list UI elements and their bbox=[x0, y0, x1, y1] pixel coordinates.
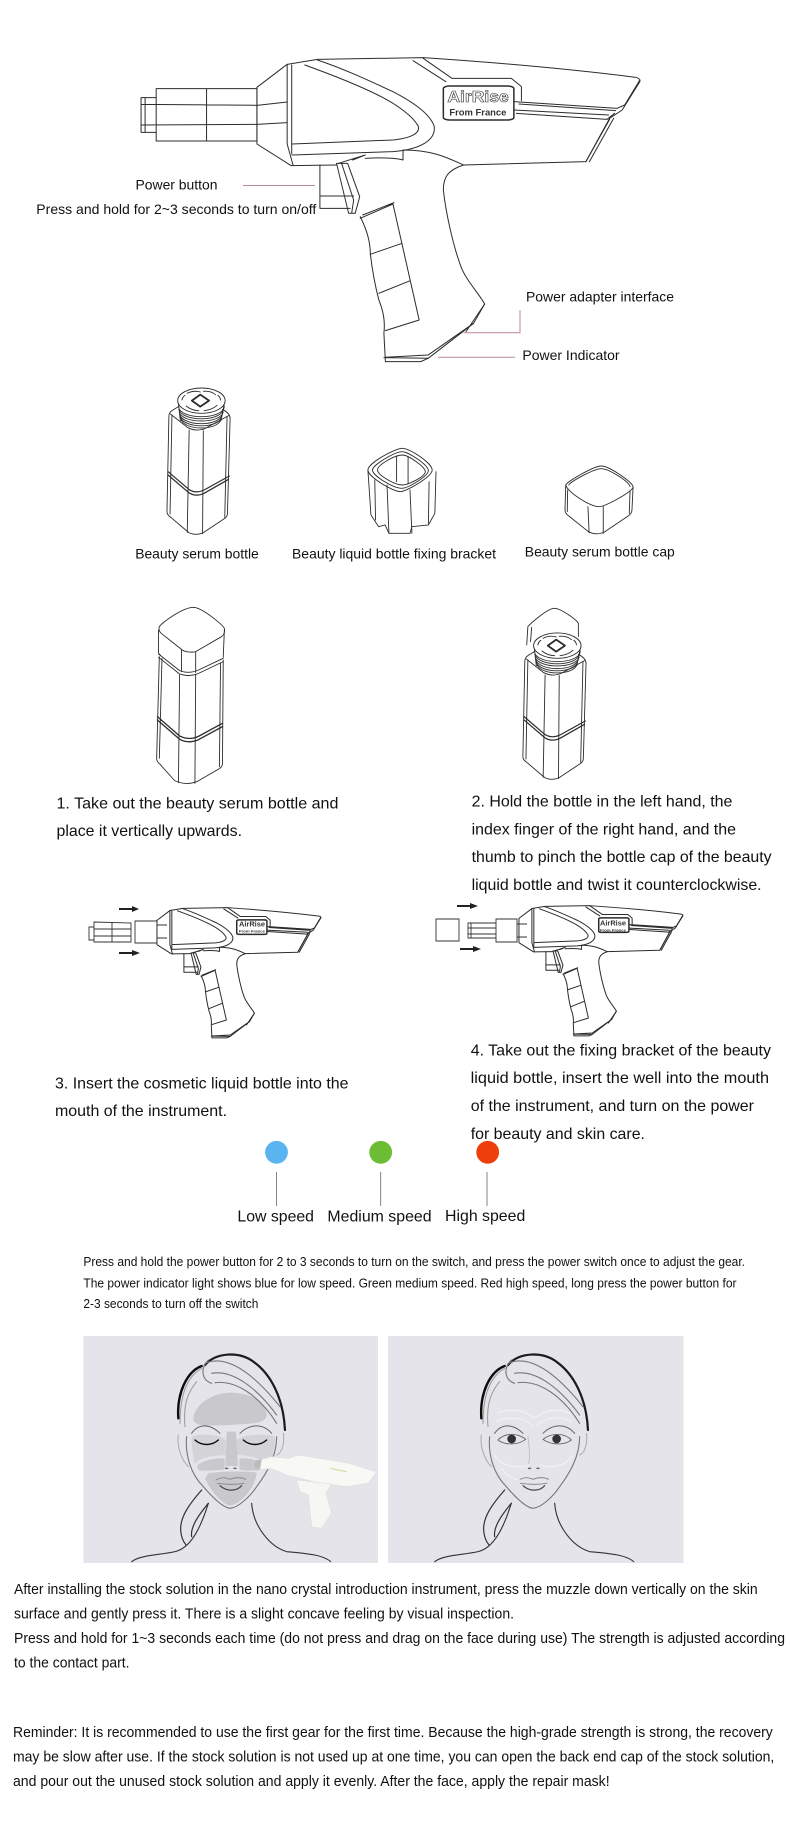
step 1 text bbox=[56, 795, 338, 840]
step 2 text: liquid bottle and twist it counterclockwise. bbox=[472, 877, 762, 894]
usage instructions: After installing the stock solution in the nano crystal introduction instrument, press the muzzle down vertically on the skin bbox=[14, 1582, 758, 1598]
label: beauty serum bottle: Beauty serum bottle bbox=[135, 545, 259, 561]
logo text: From France bbox=[239, 929, 266, 934]
logo text bbox=[239, 922, 266, 934]
icon: closed bottle, step 1 bbox=[157, 607, 225, 783]
logo text: AirRise bbox=[239, 922, 265, 929]
panel: face after treatment bbox=[388, 1336, 684, 1563]
logo text: AirRise bbox=[600, 920, 626, 928]
open eyes bbox=[498, 1434, 571, 1463]
label: bottle cap: Beauty serum bottle cap bbox=[525, 544, 675, 560]
callout: power indicator: Power Indicator bbox=[522, 347, 620, 363]
step 4 text: of the instrument, and turn on the power bbox=[471, 1098, 755, 1115]
usage instructions: surface and gently press it. There is a slight concave feeling by visual inspection. bbox=[14, 1606, 514, 1622]
face illustration bbox=[435, 1355, 634, 1562]
removed cap bbox=[527, 608, 578, 645]
small gun body bbox=[519, 906, 683, 1036]
instruction paragraph: The power indicator light shows blue for low speed. Green medium speed. Red high speed, long press the power button for bbox=[83, 1276, 736, 1290]
medium speed indicator bbox=[327, 1141, 432, 1226]
logo plate text: AirRise bbox=[447, 89, 509, 106]
step 1 text: place it vertically upwards. bbox=[56, 823, 242, 840]
main instrument diagram bbox=[141, 58, 640, 362]
white massage lines bbox=[495, 1410, 573, 1480]
reminder text: may be slow after use. If the stock solution is not used up at one time, you can open the back end cap of the stock solution, bbox=[13, 1750, 774, 1766]
usage instructions bbox=[14, 1582, 785, 1672]
step 2 text bbox=[472, 793, 772, 894]
closed eyes bbox=[195, 1440, 267, 1444]
step 4 text bbox=[471, 1042, 771, 1143]
face treatment illustration bbox=[132, 1355, 377, 1562]
icon: bottle cap bbox=[565, 466, 633, 534]
logo text: From France bbox=[600, 928, 627, 933]
step 2 text: thumb to pinch the bottle cap of the beauty bbox=[472, 849, 772, 866]
logo plate text: From France bbox=[449, 108, 506, 118]
step 2 text: 2. Hold the bottle in the left hand, the bbox=[472, 793, 733, 810]
usage instructions: to the contact part. bbox=[14, 1656, 130, 1672]
step 4 text: 4. Take out the fixing bracket of the beauty bbox=[471, 1042, 771, 1059]
instruction paragraph bbox=[83, 1255, 745, 1311]
label: fixing bracket: Beauty liquid bottle fixing bracket bbox=[292, 545, 496, 561]
icon: bottle with cap removed, step 2 bbox=[523, 608, 586, 779]
reminder text bbox=[13, 1725, 774, 1790]
reminder text: Reminder: It is recommended to use the first gear for the first time. Because the high-grade strength is strong, the recovery bbox=[13, 1725, 774, 1741]
usage instructions: Press and hold for 1~3 seconds each time (do not press and drag on the face during use) The strength is adjusted according bbox=[14, 1631, 785, 1647]
logo text bbox=[600, 920, 627, 933]
instruction paragraph: 2-3 seconds to turn off the switch bbox=[83, 1297, 258, 1311]
low speed indicator bbox=[237, 1141, 314, 1226]
high speed indicator: High speed bbox=[445, 1208, 525, 1225]
small gun body bbox=[157, 908, 321, 1038]
step 3 instrument with bottle bbox=[89, 906, 321, 1038]
bottle parts bbox=[89, 921, 167, 943]
logo plate text bbox=[447, 89, 509, 118]
reminder text: and pour out the unused stock solution and apply it evenly. After the face, apply the repair mask! bbox=[13, 1774, 610, 1790]
medium speed indicator: Medium speed bbox=[327, 1209, 432, 1226]
arrow bottom bbox=[119, 950, 140, 956]
panel background bbox=[83, 1336, 378, 1563]
step 4 text: for beauty and skin care. bbox=[471, 1126, 645, 1143]
main instrument drawing bbox=[141, 58, 640, 362]
step 3 text: mouth of the instrument. bbox=[55, 1103, 227, 1120]
step 2 text: index finger of the right hand, and the bbox=[472, 821, 736, 838]
instruction paragraph: Press and hold the power button for 2 to 3 seconds to turn on the switch, and press the power switch once to adjust the gear. bbox=[83, 1255, 745, 1269]
callout: power adapter interface bbox=[464, 289, 674, 333]
step 4 text: liquid bottle, insert the well into the mouth bbox=[471, 1070, 769, 1087]
step 4 instrument with bracket bbox=[436, 903, 683, 1036]
speed indicator legend bbox=[237, 1141, 525, 1226]
high speed indicator bbox=[445, 1141, 525, 1225]
arrow bottom bbox=[460, 946, 481, 952]
callout: power button: Power button bbox=[136, 176, 218, 192]
icon: fixing bracket bbox=[368, 448, 436, 533]
panel background bbox=[388, 1336, 684, 1563]
step 3 text bbox=[55, 1075, 349, 1120]
icon: beauty serum bottle bbox=[167, 388, 230, 534]
step 3 text: 3. Insert the cosmetic liquid bottle into the bbox=[55, 1075, 349, 1092]
arrow top bbox=[119, 906, 139, 912]
step 1 text: 1. Take out the beauty serum bottle and bbox=[56, 795, 338, 812]
white instrument bbox=[254, 1455, 377, 1528]
treatment zones bbox=[192, 1393, 275, 1506]
low speed indicator: Low speed bbox=[237, 1209, 314, 1226]
panel: face with instrument bbox=[83, 1336, 378, 1563]
bracket, well and collar bbox=[436, 919, 527, 942]
arrow top bbox=[457, 903, 478, 909]
callout: press and hold: Press and hold for 2~3 seconds to turn on/off bbox=[36, 201, 316, 217]
callout: power adapter interface: Power adapter interface bbox=[526, 289, 674, 305]
